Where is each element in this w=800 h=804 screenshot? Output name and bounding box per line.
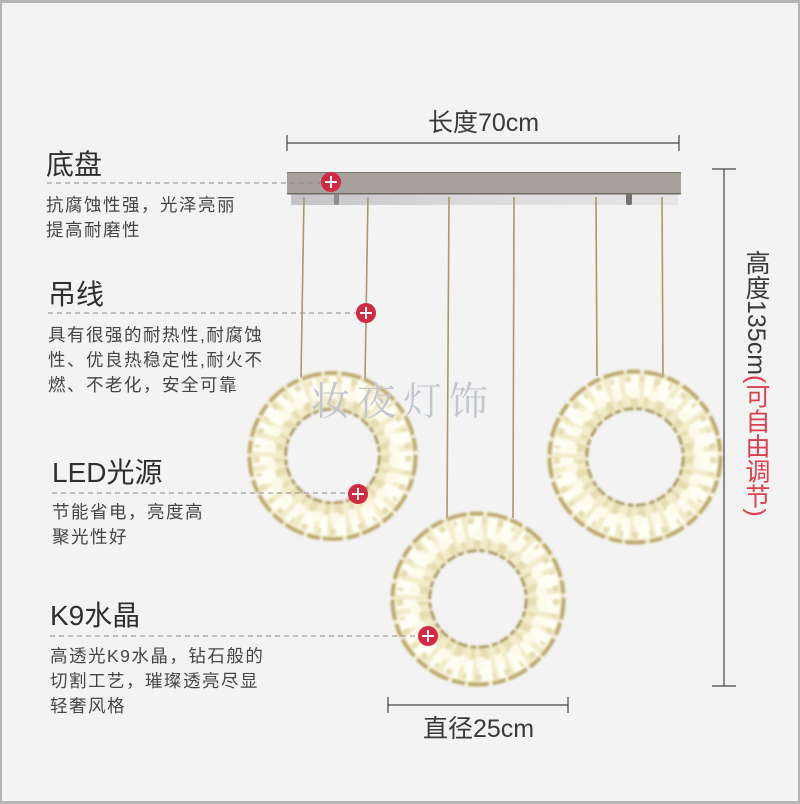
height label: 高度135cm (可自由调节) — [742, 250, 770, 517]
base plate — [287, 172, 681, 205]
crystal ring: right — [550, 372, 720, 542]
text: wire: 具有很强的耐热性,耐腐蚀 — [48, 325, 263, 345]
marker: crystal — [418, 626, 438, 646]
diameter dimension line — [388, 697, 568, 713]
crystal ring: left — [250, 373, 416, 539]
text: base plate — [46, 195, 236, 240]
heading: crystal: K9水晶 — [50, 600, 140, 631]
heading: base plate: 底盘 — [46, 149, 102, 180]
hanging wires — [301, 197, 663, 518]
marker: wire — [356, 303, 376, 323]
marker: base plate — [321, 172, 341, 192]
diameter label: 直径25cm — [423, 715, 534, 743]
leader lines — [47, 183, 422, 636]
watermark: 妆夜灯饰 — [311, 381, 495, 424]
text: crystal: 切割工艺，璀璨透亮尽显 — [50, 671, 259, 691]
text: base plate: 提高耐磨性 — [46, 220, 141, 240]
length dimension line — [287, 135, 679, 151]
text: crystal: 高透光K9水晶，钻石般的 — [50, 646, 264, 666]
text: wire — [48, 325, 263, 395]
text: base plate: 抗腐蚀性强，光泽亮丽 — [46, 195, 236, 215]
text: wire: 性、优良热稳定性,耐火不 — [48, 350, 263, 370]
heading: wire: 吊线 — [48, 279, 104, 310]
marker: LED — [348, 484, 368, 504]
text: LED — [52, 502, 204, 547]
text: wire: 燃、不老化，安全可靠 — [48, 375, 238, 395]
text: LED: 聚光性好 — [52, 527, 128, 547]
text: crystal — [50, 646, 264, 716]
text: LED: 节能省电，亮度高 — [52, 502, 204, 522]
heading: LED: LED光源 — [52, 457, 162, 488]
length label: 长度70cm — [428, 109, 539, 137]
height dimension line — [712, 169, 736, 686]
crystal ring: bottom — [393, 514, 563, 684]
text: crystal: 轻奢风格 — [50, 696, 126, 716]
